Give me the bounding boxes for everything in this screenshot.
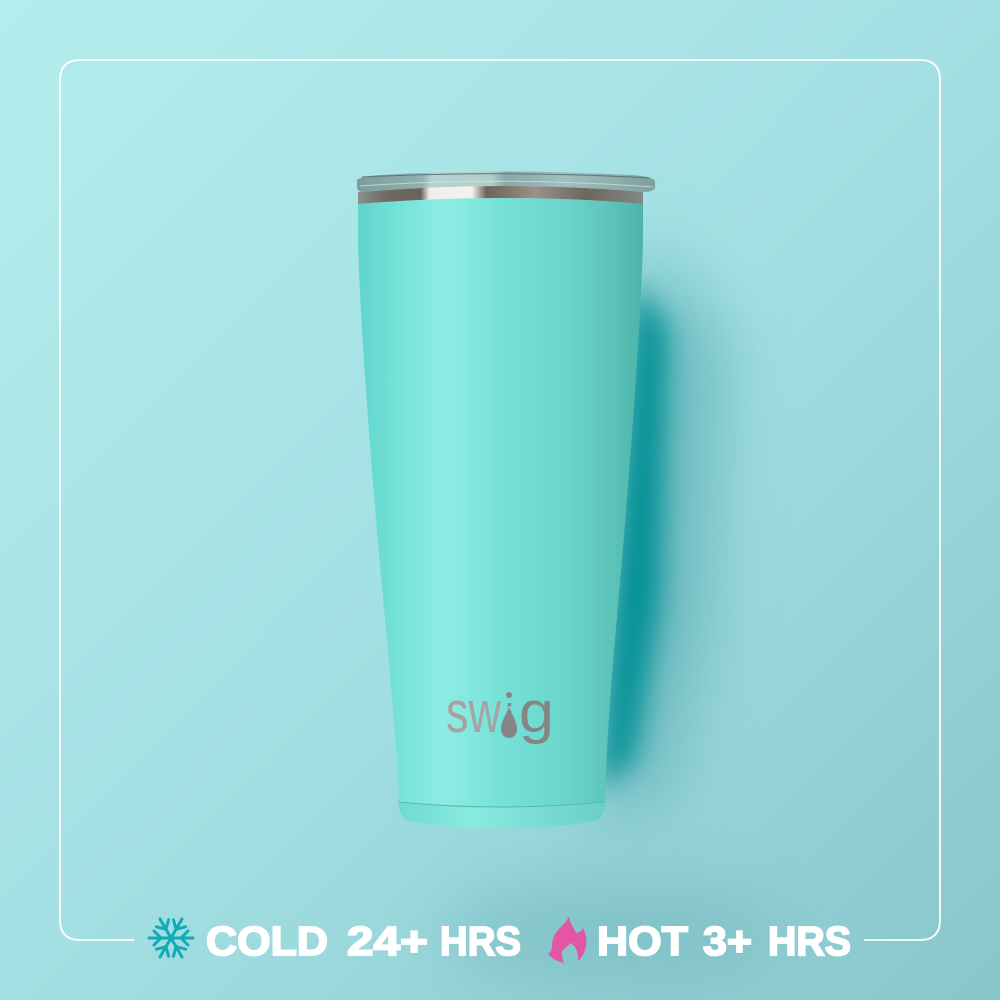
tumbler shadow	[600, 230, 725, 820]
label: hot: HRS	[768, 918, 851, 964]
white rounded frame	[60, 60, 940, 940]
label: hot: HOT	[597, 918, 688, 964]
tumbler	[357, 172, 655, 828]
label: hot: 3+	[703, 918, 752, 964]
icon: logo water drop	[501, 692, 517, 738]
label: cold: 24+	[347, 918, 428, 964]
label: cold: COLD	[206, 918, 328, 964]
label: hot	[597, 918, 851, 964]
swig logo: g	[519, 680, 554, 745]
swig logo: i	[505, 697, 514, 741]
tumbler base	[398, 798, 606, 828]
icon: flame	[548, 916, 586, 963]
swig logo	[446, 680, 554, 745]
label: cold	[206, 918, 521, 964]
swig logo: sw	[446, 680, 502, 745]
label: cold: HRS	[440, 918, 521, 964]
clear lid	[357, 172, 655, 192]
steel rim	[358, 186, 643, 204]
icon: snowflake	[149, 915, 193, 961]
tumbler body	[358, 198, 643, 807]
